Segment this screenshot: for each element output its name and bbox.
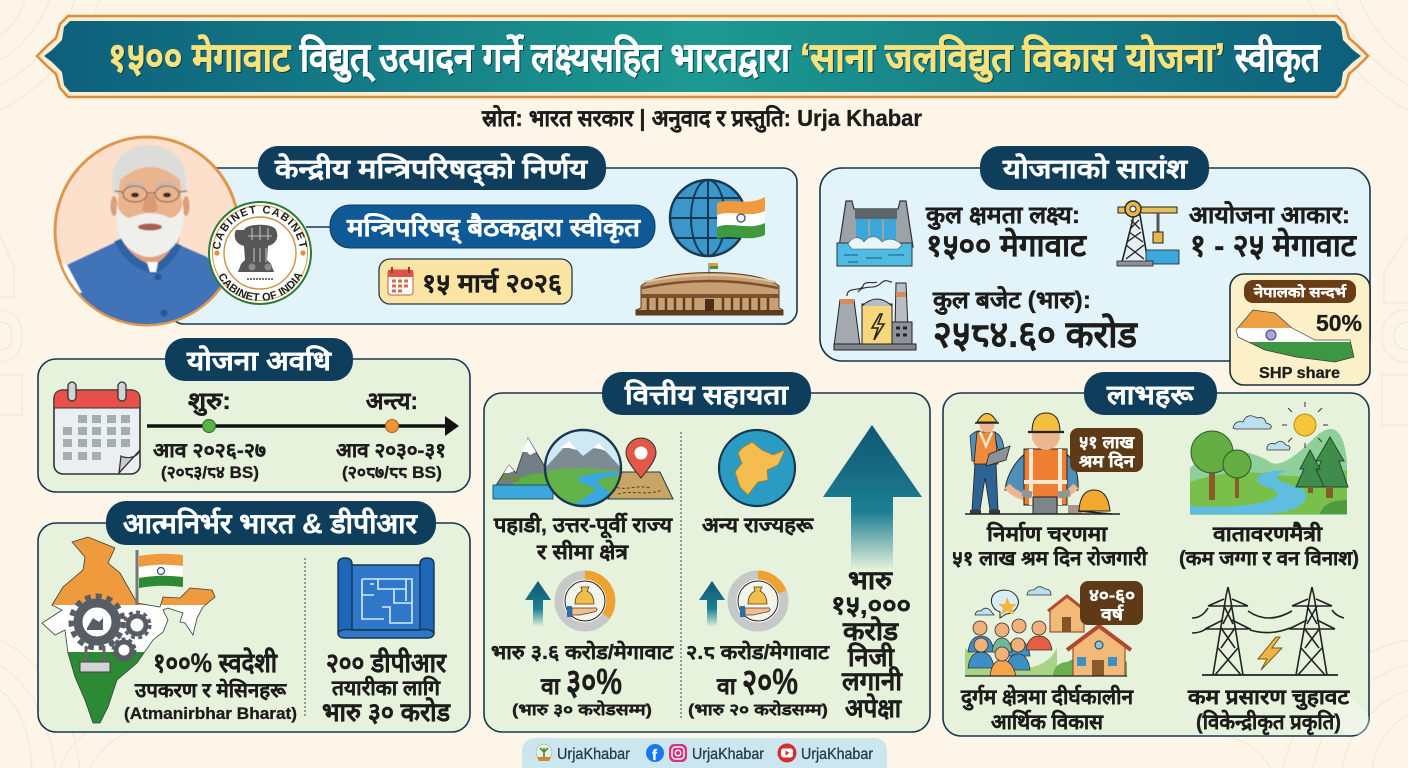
text: low transmission loss: कम प्रसारण चुहावट	[1187, 686, 1351, 711]
icon: blueprint	[338, 558, 434, 638]
text: job creation: निर्माण चरणमा	[986, 521, 1109, 546]
timeline end: (२०८७/८८ BS)	[342, 463, 442, 482]
badge: 40-60 years: ४०-६०	[1089, 586, 1135, 605]
heading: benefits: लाभहरू	[1106, 380, 1194, 410]
text: DPR preparation: भारु ३० करोड	[322, 697, 451, 727]
text: other states: अन्य राज्यहरू	[702, 514, 815, 537]
badge: 51 lakh labour days	[1070, 428, 1143, 472]
title text: स्वीकृत	[1234, 34, 1321, 83]
text: remote area development: दुर्गम क्षेत्रमा दीर्घकालीन	[960, 684, 1134, 711]
icon: Indian flag	[137, 550, 183, 605]
text: hilly regions: पहाडी, उत्तर-पूर्वी राज्य	[493, 512, 673, 539]
text: DPR preparation: २०० डीपीआर	[326, 647, 447, 678]
text: subsidy hilly regions: (भारु ३० करोडसम्म)	[512, 700, 652, 719]
text: subsidy other states: २०%	[742, 661, 798, 702]
timeline arrow	[147, 416, 459, 436]
heading: cabinet decision	[258, 146, 606, 190]
badge: 40-60 years: वर्ष	[1100, 604, 1124, 624]
text: subsidy hilly regions: ३०%	[566, 661, 622, 702]
heading: financial assistance: वित्तीय सहायता	[624, 379, 789, 410]
icon: parliament building	[636, 263, 783, 315]
footer: social handles: UrjaKhabar	[557, 746, 631, 763]
text: capacity target: १५०० मेगावाट	[926, 227, 1087, 263]
text: subsidy other states: २.८ करोड/मेगावाट	[686, 640, 830, 664]
footer: social handles: UrjaKhabar	[801, 746, 874, 763]
icon: India map with gears	[40, 535, 220, 727]
icon: Facebook	[646, 744, 664, 764]
text: capacity target: कुल क्षमता लक्ष्य:	[925, 202, 1080, 230]
text: subsidy hilly regions	[491, 640, 674, 719]
text: private investment: करोड	[842, 616, 899, 646]
text: indigenous equipment: १००% स्वदेशी	[153, 647, 278, 678]
badge: 40-60 years	[1080, 581, 1143, 625]
text: remote area development: आर्थिक विकास	[991, 709, 1104, 734]
timeline end: आव २०३०-३१	[336, 440, 446, 462]
title banner	[37, 16, 1368, 97]
seal: cabinet of India: CABINET CABINET	[213, 206, 308, 249]
text: private investment: भारु	[848, 565, 894, 595]
callout: Nepal context: SHP share	[1259, 365, 1340, 382]
text: environment friendly: वातावरणमैत्री	[1212, 521, 1324, 546]
text: subsidy other states	[686, 640, 830, 719]
text: indigenous equipment: उपकरण र मेसिनहरू	[134, 678, 287, 702]
text: subsidy hilly regions: वा	[540, 673, 561, 699]
icon: landscape	[1190, 402, 1348, 515]
panel: scheme summary	[820, 146, 1370, 385]
text: project size	[1189, 201, 1357, 263]
map: Nepal tricolour	[1236, 310, 1354, 362]
text: low transmission loss	[1187, 686, 1351, 736]
callout heading: नेपालको सन्दर्भ	[1253, 284, 1347, 300]
heading: scheme summary: योजनाको सारांश	[1002, 153, 1189, 184]
portrait photo	[55, 137, 240, 330]
panel: benefits	[943, 372, 1369, 736]
donut: 30 percent	[559, 575, 611, 627]
heading: scheme period	[165, 338, 353, 381]
text: border areas: र सीमा क्षेत्र	[536, 539, 630, 564]
connector line	[306, 226, 332, 228]
icon: power plant	[834, 281, 916, 350]
pill: approved by cabinet meeting	[330, 205, 655, 248]
text: total budget: २५८४.६० करोड	[933, 313, 1138, 355]
timeline start: आव २०२६-२७	[153, 440, 266, 462]
icon: YouTube	[778, 744, 796, 762]
badge: 51 lakh labour days: श्रम दिन	[1078, 451, 1135, 471]
timeline start: शुरु:	[188, 388, 231, 416]
text: project size: १ - २५ मेगावाट	[1190, 227, 1357, 263]
icon: community and houses	[965, 587, 1131, 676]
pill: approved by cabinet meeting: मन्त्रिपरिषद् बैठकद्वारा स्वीकृत	[346, 213, 642, 244]
panel: financial assistance	[484, 372, 930, 732]
timeline start: (२०८३/८४ BS)	[161, 463, 259, 482]
title text: १५०० मेगावाट	[108, 34, 292, 80]
heading: self-reliant India and DPR	[106, 501, 436, 545]
icon: Facebook: f	[652, 747, 658, 764]
heading: cabinet decision: केन्द्रीय मन्त्रिपरिषद्को निर्णय	[274, 153, 589, 187]
heading: benefits	[1084, 372, 1217, 415]
donut: 20 percent	[732, 575, 784, 627]
text: private investment: निजी	[847, 642, 895, 672]
text: project size: आयोजना आकार:	[1189, 201, 1350, 229]
heading: self-reliant India and DPR: आत्मनिर्भर भारत & डीपीआर	[123, 507, 419, 539]
icon: large calendar	[54, 382, 140, 474]
icon: construction workers	[965, 413, 1120, 514]
small arrow: other states	[699, 581, 725, 627]
heading: financial assistance	[602, 372, 811, 415]
panel: cabinet decision	[54, 136, 798, 326]
text: private investment: १५,०००	[831, 590, 911, 620]
heading: scheme period: योजना अवधि	[186, 345, 333, 376]
text: capacity target	[925, 202, 1087, 263]
text: private investment	[831, 565, 911, 723]
icon: crane	[1117, 201, 1179, 266]
title text: विद्युत् उत्पादन गर्ने लक्ष्यसहित भारतद्वारा	[299, 34, 791, 83]
text: indigenous equipment	[124, 647, 297, 723]
text: total budget	[932, 286, 1138, 355]
seal: cabinet of India: CABINET OF INDIA	[219, 274, 303, 301]
text: subsidy other states: वा	[716, 673, 737, 699]
small arrow: hilly regions	[525, 581, 551, 627]
icon: Instagram	[669, 744, 687, 762]
text: subsidy hilly regions: भारु ३.६ करोड/मेगावाट	[491, 640, 674, 664]
text: private investment: अपेक्षा	[845, 693, 902, 723]
timeline end: अन्त्य:	[366, 388, 418, 415]
seal: cabinet of India	[208, 201, 312, 305]
icon: UrjaKhabar logo	[536, 744, 552, 761]
icon: hills, rivers and map pin	[493, 430, 673, 506]
text: total budget: कुल बजेट (भारु):	[932, 286, 1091, 315]
footer: social handles: UrjaKhabar	[692, 746, 765, 763]
heading: scheme summary	[980, 146, 1209, 190]
badge: 51 lakh labour days: ५१ लाख	[1079, 433, 1135, 452]
text: environment friendly	[1179, 521, 1359, 570]
text: remote area development	[960, 684, 1134, 734]
text: private investment: लगानी	[841, 666, 903, 696]
panel: self-reliant India and DPR	[38, 501, 470, 732]
icon: globe with flag	[670, 180, 765, 256]
icon: transmission towers	[1192, 587, 1344, 675]
icon: other states map	[719, 430, 795, 506]
text: environment friendly: (कम जग्गा र वन विनाश)	[1179, 546, 1359, 570]
timeline start	[153, 388, 266, 482]
icon: calendar small	[388, 267, 413, 295]
text: subsidy other states: (भारु २० करोडसम्म)	[688, 700, 828, 719]
icon: dam	[837, 201, 913, 266]
panel: scheme period	[38, 338, 470, 492]
source line: स्रोत: भारत सरकार | अनुवाद र प्रस्तुति: Urja Khabar	[481, 104, 922, 133]
date box	[379, 259, 572, 304]
text: DPR preparation	[322, 647, 451, 727]
title text: ‘साना जलविद्युत विकास योजना’	[800, 34, 1225, 83]
callout: Nepal context	[1230, 274, 1370, 385]
text: job creation	[952, 521, 1148, 570]
footer: social handles	[522, 738, 887, 768]
text: indigenous equipment: (Atmanirbhar Bharat)	[124, 704, 297, 723]
timeline end	[336, 388, 446, 482]
text: job creation: ५१ लाख श्रम दिन रोजगारी	[952, 546, 1148, 570]
title text	[108, 34, 1321, 83]
text: low transmission loss: (विकेन्द्रीकृत प्रकृति)	[1196, 709, 1341, 736]
date box: १५ मार्च २०२६	[422, 268, 562, 298]
text: DPR preparation: तयारीका लागि	[331, 675, 441, 700]
callout: Nepal context: 50%	[1316, 310, 1362, 336]
large upward arrow	[823, 425, 922, 570]
